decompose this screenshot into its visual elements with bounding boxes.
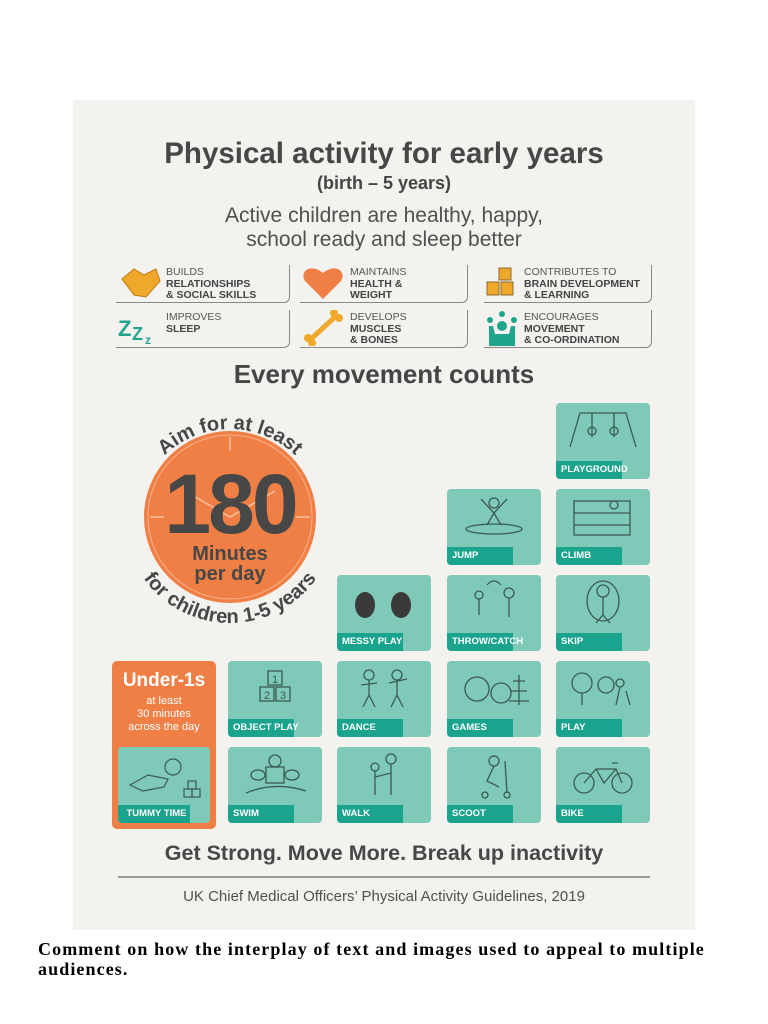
benefit: sleep: IMPROVES bbox=[166, 311, 221, 323]
tile: climb: CLIMB bbox=[561, 550, 591, 561]
benefit: sleep: Z bbox=[132, 324, 143, 344]
clock: 180 minutes: for children 1-5 years bbox=[144, 572, 315, 624]
clock: 180 minutes: Minutes bbox=[192, 543, 268, 565]
tile: throw/catch bbox=[447, 575, 541, 651]
tile: dance bbox=[337, 661, 431, 737]
benefit: muscles: DEVELOPS bbox=[350, 311, 407, 323]
question text: audiences. bbox=[38, 959, 129, 979]
benefit: sleep bbox=[116, 310, 290, 348]
tile: object play: 1 bbox=[272, 674, 278, 686]
panel: infographic bbox=[73, 100, 695, 930]
benefit: health: WEIGHT bbox=[350, 289, 392, 301]
tile: object play bbox=[228, 661, 322, 737]
benefit: movement: & CO-ORDINATION bbox=[524, 334, 619, 346]
citation: UK Chief Medical Officers’ Physical Activity Guidelines, 2019 bbox=[183, 888, 585, 905]
tile: walk bbox=[337, 747, 431, 823]
heading: every movement counts: Every movement counts bbox=[234, 359, 534, 389]
tagline bbox=[225, 204, 543, 251]
tile: games: GAMES bbox=[452, 722, 487, 733]
subtitle age: (birth – 5 years) bbox=[317, 173, 451, 193]
tile: play: PLAY bbox=[561, 722, 585, 733]
tile: bike: BIKE bbox=[561, 808, 584, 819]
benefit: movement: ENCOURAGES bbox=[524, 311, 599, 323]
tile: playground: PLAYGROUND bbox=[561, 464, 628, 475]
text: 30 minutes: across the day bbox=[128, 721, 200, 733]
benefit: sleep: z bbox=[145, 333, 151, 347]
benefit: relationships: RELATIONSHIPS bbox=[166, 278, 250, 290]
activity tiles bbox=[228, 403, 650, 823]
benefit: muscles: MUSCLES bbox=[350, 322, 401, 334]
text: 30 minutes bbox=[128, 695, 200, 733]
benefit: health: MAINTAINS bbox=[350, 266, 406, 278]
benefit: health bbox=[300, 265, 468, 303]
question text bbox=[38, 939, 705, 979]
question text: Comment on how the interplay of text and images used to appeal to multiple bbox=[38, 939, 705, 959]
benefit: brain: & LEARNING bbox=[524, 289, 589, 301]
tagline: Active children are healthy, happy, bbox=[225, 204, 543, 227]
slogan: Get Strong. Move More. Break up inactivity bbox=[165, 841, 603, 865]
tile: jump: JUMP bbox=[452, 550, 478, 561]
clock: 180 minutes: per day bbox=[194, 563, 266, 585]
tile: swim bbox=[228, 747, 322, 823]
tile: object play: 3 bbox=[280, 690, 286, 702]
tile: games bbox=[447, 661, 541, 737]
tile: skip bbox=[556, 575, 650, 651]
clock: 180 minutes: 180 bbox=[164, 457, 296, 551]
benefit: muscles: & BONES bbox=[350, 334, 398, 346]
tile: swim: SWIM bbox=[233, 808, 259, 819]
benefit: brain: CONTRIBUTES TO bbox=[524, 266, 616, 278]
tile: scoot bbox=[447, 747, 541, 823]
tile: play bbox=[556, 661, 650, 737]
benefit: muscles bbox=[300, 310, 468, 348]
benefit: sleep: SLEEP bbox=[166, 322, 200, 334]
benefit: brain bbox=[484, 265, 652, 303]
tile: messy play bbox=[337, 575, 431, 651]
benefit: health: HEALTH & bbox=[350, 278, 402, 290]
text: 30 minutes: at least bbox=[146, 695, 182, 707]
tile: object play: OBJECT PLAY bbox=[233, 722, 299, 733]
tile: walk: WALK bbox=[342, 808, 370, 819]
tile: tummy time bbox=[118, 747, 210, 823]
tile: playground bbox=[556, 403, 650, 479]
benefit: relationships: BUILDS bbox=[166, 266, 204, 278]
text: 30 minutes: 30 minutes bbox=[137, 708, 191, 720]
tile: jump bbox=[447, 489, 541, 565]
clock: 180 minutes: Aim for at least bbox=[160, 418, 302, 456]
benefit: movement: MOVEMENT bbox=[524, 322, 585, 334]
tagline: school ready and sleep better bbox=[246, 228, 522, 251]
tile: climb bbox=[556, 489, 650, 565]
benefit: sleep: Z bbox=[118, 316, 131, 341]
tile: scoot: SCOOT bbox=[452, 808, 486, 819]
panel: under-1s bbox=[112, 661, 216, 829]
tile: bike bbox=[556, 747, 650, 823]
benefit: relationships: & SOCIAL SKILLS bbox=[166, 289, 256, 301]
title: Physical activity for early years bbox=[164, 137, 604, 170]
tile: object play: 2 bbox=[264, 690, 270, 702]
heading: under-1s: Under-1s bbox=[123, 670, 205, 691]
tile: skip: SKIP bbox=[561, 636, 583, 647]
tile: dance: DANCE bbox=[342, 722, 376, 733]
benefits grid bbox=[116, 265, 652, 348]
tile: messy play: MESSY PLAY bbox=[342, 636, 402, 647]
clock: 180 minutes bbox=[144, 418, 316, 624]
tile: tummy time: TUMMY TIME bbox=[126, 808, 186, 819]
benefit: movement bbox=[484, 310, 652, 348]
benefit: brain: BRAIN DEVELOPMENT bbox=[524, 278, 640, 290]
benefit: relationships bbox=[116, 265, 290, 303]
tile: throw/catch: THROW/CATCH bbox=[452, 636, 523, 647]
